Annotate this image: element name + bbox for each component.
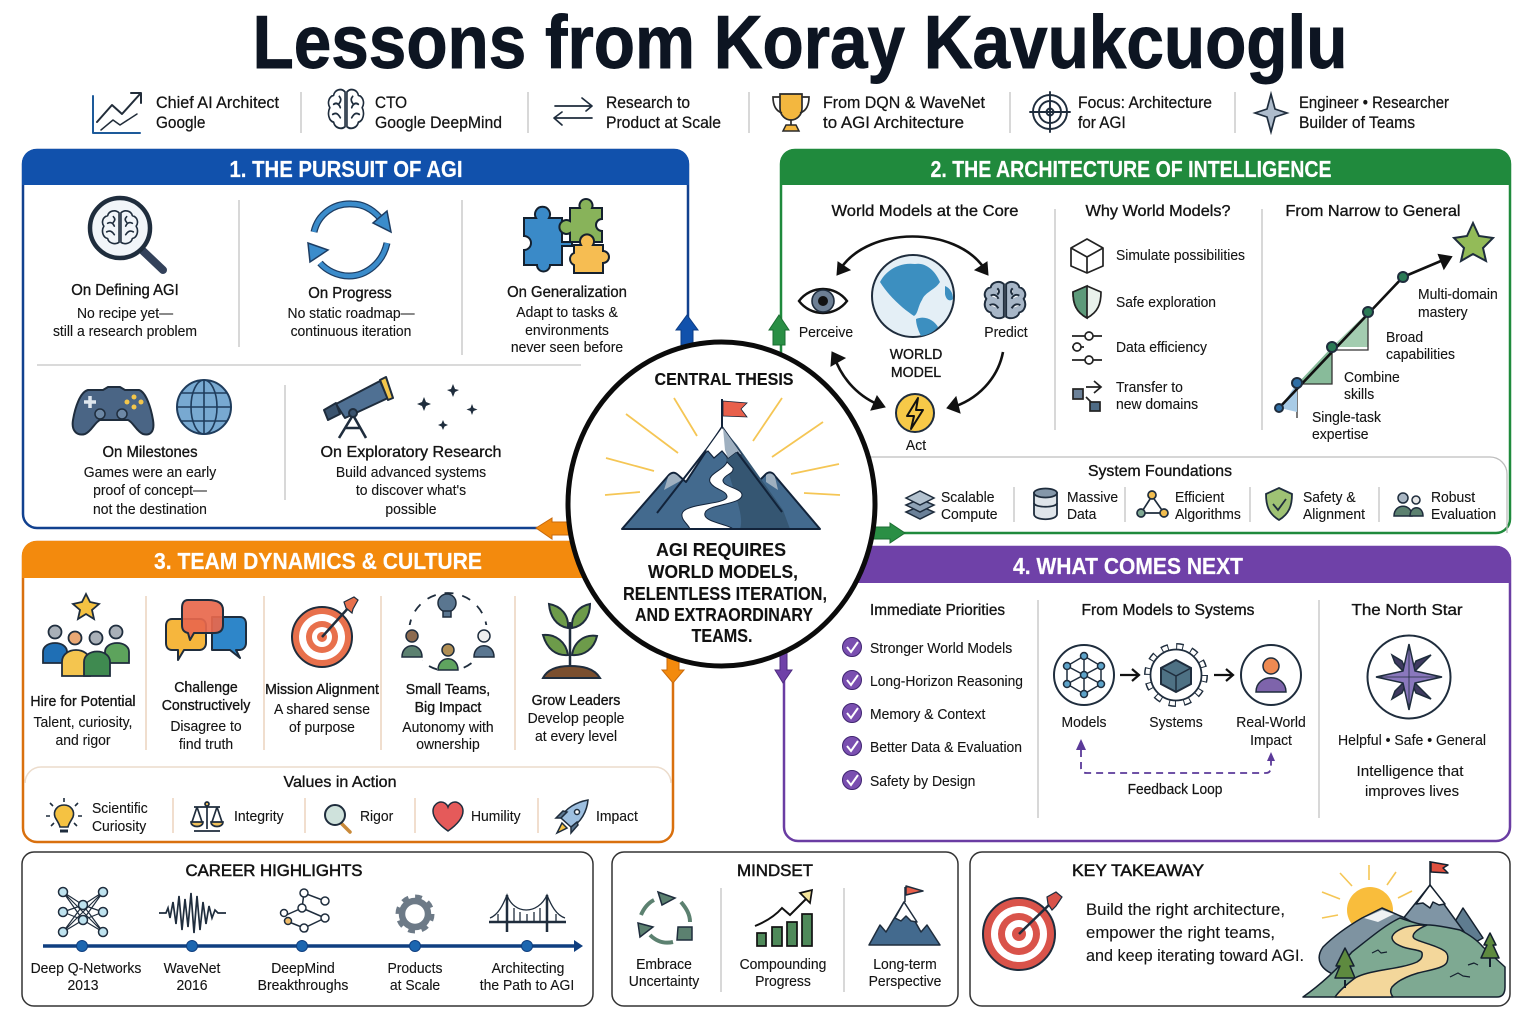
thesis statement: AND EXTRAORDINARY xyxy=(635,604,814,625)
Scientific Curiosity xyxy=(92,801,148,835)
arrow: to panel 3 xyxy=(536,518,572,539)
Hire for Potential text: Hire for Potential xyxy=(30,694,136,710)
icon: models network xyxy=(1054,645,1114,705)
credential second line: Google DeepMind xyxy=(375,114,502,132)
Long-term Perspective label xyxy=(869,957,941,990)
Massive Data: Massive xyxy=(1067,490,1118,506)
stair labels: skills xyxy=(1344,387,1374,403)
stair labels: Single-task xyxy=(1312,410,1382,426)
icon: mountain with flag and path xyxy=(622,399,820,529)
icon: neural network xyxy=(58,888,108,936)
values in action box xyxy=(25,767,671,835)
panel 4: what comes next xyxy=(784,546,1511,841)
timeline labels: Deep Q-Networks xyxy=(31,961,141,977)
stair labels: Broad xyxy=(1386,330,1423,346)
timeline labels: 2016 xyxy=(177,978,207,994)
Compounding Progress label: Progress xyxy=(755,974,811,990)
On Exploratory Research text: Build advanced systems xyxy=(336,465,486,481)
Perceive label: Perceive xyxy=(799,325,853,341)
world model cycle xyxy=(799,236,1028,454)
icon: green shield xyxy=(1266,488,1292,520)
Grow Leaders text xyxy=(528,693,624,745)
timeline labels: Products xyxy=(387,961,443,977)
Embrace Uncertainty label: Embrace xyxy=(636,957,692,973)
icon: four-point star xyxy=(1255,94,1287,132)
icon: compounding chart xyxy=(755,890,812,946)
check: safety xyxy=(842,770,862,790)
icon: globe grid xyxy=(177,380,231,434)
sun xyxy=(1347,887,1393,933)
icon: eye xyxy=(799,289,847,313)
icon: waveform xyxy=(159,893,226,933)
arrow: systems to impact xyxy=(1214,669,1233,681)
check: stronger world models xyxy=(842,638,862,656)
subheading: immediate priorities: Immediate Priorities xyxy=(870,602,1005,619)
panel 4 heading: 4. WHAT COMES NEXT xyxy=(1013,553,1243,579)
trend line xyxy=(1275,255,1451,412)
icon: puzzle pieces xyxy=(524,199,609,273)
icon: lightbulb xyxy=(46,798,82,831)
panel: key takeaway xyxy=(970,852,1510,1006)
icon: crosshair target xyxy=(1030,92,1070,132)
icon: people xyxy=(1394,493,1423,516)
timeline labels: Architecting xyxy=(492,961,564,977)
credentials bar xyxy=(93,90,1449,133)
icon: compass rose xyxy=(1368,636,1450,718)
credential second line: for AGI xyxy=(1078,115,1126,132)
Safety and Alignment xyxy=(1303,490,1365,523)
stair labels: capabilities xyxy=(1386,347,1455,363)
Hire for Potential text: and rigor xyxy=(56,733,111,749)
diagram labels: Models xyxy=(1062,715,1106,731)
diagram labels: Impact xyxy=(1250,733,1292,749)
Small Teams text: Big Impact xyxy=(415,700,481,716)
credential second line: to AGI Architecture xyxy=(823,114,964,132)
diagram labels: Real-World xyxy=(1236,715,1306,731)
Challenge Constructively text xyxy=(162,680,251,753)
panel 1: the pursuit of AGI xyxy=(22,149,689,528)
feedback loop label: Feedback Loop xyxy=(1128,782,1222,798)
icon: star xyxy=(1454,223,1493,261)
arrow: orange down xyxy=(662,655,684,683)
career heading: CAREER HIGHLIGHTS xyxy=(186,861,362,880)
icon: telescope xyxy=(324,377,393,438)
arrow: to panel 2 xyxy=(769,315,789,345)
credential second line: Product at Scale xyxy=(606,114,721,132)
icon: impact person xyxy=(1241,645,1301,705)
Grow Leaders text: Grow Leaders xyxy=(532,693,620,709)
timeline labels: DeepMind xyxy=(271,961,335,977)
Challenge Constructively text: Challenge xyxy=(174,680,238,696)
icon: bridge xyxy=(489,895,566,932)
models to systems diagram xyxy=(1054,602,1306,798)
key takeaway text: empower the right teams, xyxy=(1086,924,1275,942)
subheading: why: Why World Models? xyxy=(1086,203,1231,220)
icon: mountain flag small xyxy=(869,886,940,945)
world model label: WORLD xyxy=(890,347,942,363)
icon: game controller xyxy=(73,387,153,434)
tufts xyxy=(1372,950,1478,977)
icon: mission target xyxy=(292,597,358,667)
icon: act lightning xyxy=(896,394,934,432)
Robust Evaluation: Evaluation xyxy=(1431,507,1496,523)
Safe exploration: Safe exploration xyxy=(1116,294,1216,311)
central thesis circle xyxy=(568,342,875,666)
icon: chat bubbles xyxy=(166,600,246,660)
subheading: The North Star xyxy=(1352,602,1463,619)
staircase chart: narrow to general xyxy=(1275,223,1498,443)
step fills xyxy=(1280,308,1368,418)
icon: small team circle xyxy=(400,593,495,677)
panel 1 header xyxy=(22,149,689,185)
panel: career highlights xyxy=(22,852,593,1006)
connector arrows to center xyxy=(536,315,905,683)
icon: cycle arrows xyxy=(308,204,391,276)
panel 2 heading: 2. THE ARCHITECTURE OF INTELLIGENCE xyxy=(930,156,1332,182)
icon: systems gear xyxy=(1148,647,1204,703)
timeline dots xyxy=(76,940,532,952)
panel 3 header xyxy=(22,541,620,578)
On Generalization text: Adapt to tasks & xyxy=(516,305,618,321)
diagram labels: Systems xyxy=(1149,715,1203,731)
On Milestones text: Games were an early xyxy=(84,465,217,481)
values heading: Values in Action xyxy=(284,774,396,791)
Rigor: Rigor xyxy=(360,809,393,825)
thesis statement: RELENTLESS ITERATION, xyxy=(623,583,827,604)
On Exploratory Research text: to discover what's xyxy=(356,483,466,499)
priorities checklist xyxy=(842,638,1023,790)
timeline labels: 2013 xyxy=(68,978,98,994)
winding path xyxy=(1335,925,1448,997)
north star text: Helpful • Safe • General xyxy=(1338,732,1486,749)
left snow xyxy=(1364,910,1394,922)
Hire for Potential text: Talent, curiosity, xyxy=(34,715,132,731)
Long-term Perspective label: Perspective xyxy=(869,974,941,990)
key takeaway text: and keep iterating toward AGI. xyxy=(1086,947,1304,965)
Transfer text: Transfer to xyxy=(1116,380,1183,396)
timeline labels: the Path to AGI xyxy=(480,978,574,994)
icon: scales xyxy=(191,802,223,831)
illustration: mountain landscape xyxy=(1303,861,1505,997)
subheading: From Models to Systems xyxy=(1082,602,1254,619)
arrow: green right xyxy=(870,523,905,543)
Transfer text: new domains xyxy=(1116,397,1198,413)
Safety and Alignment: Alignment xyxy=(1303,507,1365,523)
On Defining AGI text xyxy=(53,282,197,340)
Simulate possibilities: Simulate possibilities xyxy=(1116,247,1245,264)
Challenge Constructively text: find truth xyxy=(179,737,233,753)
arrow: to panel 1 xyxy=(676,315,698,345)
stair labels: Combine xyxy=(1344,370,1400,386)
panel 4 header xyxy=(840,546,1511,583)
Embrace Uncertainty label: Uncertainty xyxy=(629,974,700,990)
Mission Alignment text: of purpose xyxy=(289,720,355,736)
subheading: narrow to general: From Narrow to General xyxy=(1286,203,1460,220)
icon: trophy xyxy=(773,94,809,131)
why world models list xyxy=(1071,239,1245,413)
On Exploratory Research text: On Exploratory Research xyxy=(320,444,502,461)
timeline labels: WaveNet xyxy=(164,961,220,977)
credential: CTO: CTO xyxy=(375,95,407,112)
icon: exchange arrows xyxy=(554,98,592,125)
Robust Evaluation xyxy=(1431,490,1496,523)
icon: rocket xyxy=(556,800,588,833)
thesis statement: AGI REQUIRES xyxy=(656,539,786,560)
icon: gear xyxy=(398,897,432,931)
Integrity: Integrity xyxy=(234,809,284,825)
Scientific Curiosity: Curiosity xyxy=(92,819,147,835)
snow cap xyxy=(1416,885,1445,908)
Small Teams text: ownership xyxy=(416,737,480,753)
mindset heading: MINDSET xyxy=(737,861,813,880)
On Progress text xyxy=(288,285,415,340)
On Progress text: On Progress xyxy=(308,285,392,302)
flag pennant xyxy=(1431,862,1448,873)
thesis statement: TEAMS. xyxy=(692,625,752,646)
north star text: Intelligence that xyxy=(1356,763,1464,780)
left mountain xyxy=(1319,908,1425,975)
Robust Evaluation: Robust xyxy=(1431,490,1475,506)
thesis statement: WORLD MODELS, xyxy=(648,561,798,582)
On Generalization text xyxy=(507,284,627,356)
arrow: models to systems xyxy=(1120,669,1139,681)
arrow: purple down xyxy=(775,650,792,683)
Embrace Uncertainty label xyxy=(629,957,700,990)
foundations heading: System Foundations xyxy=(1088,463,1232,480)
Memory and Context: Memory & Context xyxy=(870,707,985,723)
On Exploratory Research text: possible xyxy=(385,502,437,518)
On Milestones text: not the destination xyxy=(93,502,207,518)
Long-Horizon Reasoning: Long-Horizon Reasoning xyxy=(870,673,1023,690)
right tree xyxy=(1481,933,1499,967)
Massive Data xyxy=(1067,490,1118,523)
Mission Alignment text xyxy=(265,682,379,736)
icon: cube xyxy=(1071,239,1103,273)
stair labels: mastery xyxy=(1418,305,1468,321)
sun rays xyxy=(605,398,840,495)
north star text xyxy=(1338,732,1486,800)
icon: magnifier over brain xyxy=(90,198,163,270)
sun rays xyxy=(1322,865,1412,918)
panel 3: team dynamics and culture xyxy=(22,541,673,842)
Compounding Progress label: Compounding xyxy=(740,957,826,973)
panel 1 heading: 1. THE PURSUIT OF AGI xyxy=(230,156,462,182)
icon: recycle arrows xyxy=(638,892,692,943)
Efficient Algorithms xyxy=(1175,490,1241,523)
Efficient Algorithms: Algorithms xyxy=(1175,507,1241,523)
credential: research to product: Research to xyxy=(606,94,690,112)
timeline labels: Breakthroughs xyxy=(258,978,348,994)
icon: small magnifier xyxy=(325,805,350,832)
north star text: improves lives xyxy=(1365,783,1459,800)
icon: brain outline xyxy=(329,90,363,128)
credential: focus: Focus: Architecture xyxy=(1078,94,1212,112)
feedback loop arrow xyxy=(1076,739,1275,773)
On Milestones text: proof of concept— xyxy=(93,483,207,499)
Massive Data: Data xyxy=(1067,507,1097,523)
Grow Leaders text: at every level xyxy=(535,729,617,745)
panel 2: the architecture of intelligence xyxy=(780,149,1511,533)
icon: DeepMind graph xyxy=(280,889,329,932)
Mission Alignment text: A shared sense xyxy=(274,702,370,718)
On Defining AGI text: still a research problem xyxy=(53,324,197,340)
icon: stars xyxy=(417,384,478,430)
icon: algorithm graph xyxy=(1137,491,1168,517)
On Milestones text: On Milestones xyxy=(102,444,198,461)
icon: plant xyxy=(543,604,600,678)
stair labels xyxy=(1312,287,1498,443)
panel 2 header xyxy=(780,149,1511,185)
Scalable Compute xyxy=(941,490,998,523)
icon: earth globe xyxy=(872,255,954,337)
icon: star over people xyxy=(43,594,129,676)
Impact: Impact xyxy=(596,809,638,825)
credential: role at Google: Chief AI Architect xyxy=(156,94,279,112)
Compounding Progress label xyxy=(740,957,826,990)
system foundations box xyxy=(860,457,1507,533)
credential: engineer researcher: Engineer • Researcher xyxy=(1299,94,1449,112)
check: long-horizon xyxy=(842,670,862,690)
Safety by Design: Safety by Design xyxy=(870,774,975,790)
Small Teams text: Small Teams, xyxy=(406,682,490,698)
Efficient Algorithms: Efficient xyxy=(1175,490,1224,506)
On Defining AGI text: No recipe yet— xyxy=(77,306,174,322)
Better Data and Evaluation: Better Data & Evaluation xyxy=(870,739,1022,756)
icon: brain xyxy=(985,282,1025,318)
key takeaway heading: KEY TAKEAWAY xyxy=(1072,861,1204,880)
Humility: Humility xyxy=(471,809,521,825)
timeline xyxy=(43,940,583,952)
icon: sliders xyxy=(1072,332,1102,364)
panel 3 heading: 3. TEAM DYNAMICS & CULTURE xyxy=(154,548,482,574)
On Exploratory Research text xyxy=(320,444,502,518)
check: memory xyxy=(842,704,862,722)
main peak xyxy=(1398,885,1470,940)
Scalable Compute: Compute xyxy=(941,507,998,523)
On Progress text: continuous iteration xyxy=(291,324,411,340)
timeline labels xyxy=(31,961,574,994)
central thesis label: CENTRAL THESIS xyxy=(654,369,794,389)
cycle arrows xyxy=(831,236,1003,413)
Predict label: Predict xyxy=(984,325,1028,341)
right peak xyxy=(1450,908,1483,945)
icon: database xyxy=(1034,488,1057,519)
credential: DQN and WaveNet: From DQN & WaveNet xyxy=(823,94,985,112)
Small Teams text: Autonomy with xyxy=(402,720,494,736)
icon: heart xyxy=(433,802,463,831)
Stronger World Models: Stronger World Models xyxy=(870,641,1012,657)
icon: stacked layers xyxy=(906,491,934,519)
key takeaway text xyxy=(1086,901,1304,965)
icon: transfer xyxy=(1073,381,1101,411)
Scalable Compute: Scalable xyxy=(941,490,994,506)
thesis statement xyxy=(623,539,827,646)
timeline labels: at Scale xyxy=(390,978,440,994)
subheading: world models: World Models at the Core xyxy=(832,203,1019,220)
Small Teams text xyxy=(402,682,494,753)
title: Lessons from Koray Kavukcuoglu xyxy=(252,0,1348,84)
Challenge Constructively text: Disagree to xyxy=(170,719,242,735)
On Generalization text: environments xyxy=(525,323,609,339)
Challenge Constructively text: Constructively xyxy=(162,698,251,714)
hill xyxy=(1303,918,1505,997)
flag pole xyxy=(1429,861,1431,885)
icon: growth chart xyxy=(93,93,141,133)
key takeaway text: Build the right architecture, xyxy=(1086,901,1285,919)
credential second line: Builder of Teams xyxy=(1299,114,1415,132)
left tree xyxy=(1335,948,1355,988)
Long-term Perspective label: Long-term xyxy=(873,957,937,973)
Grow Leaders text: Develop people xyxy=(528,711,624,727)
On Defining AGI text: On Defining AGI xyxy=(71,282,179,299)
Transfer text xyxy=(1116,380,1198,413)
icon: shield xyxy=(1073,286,1101,318)
Safety and Alignment: Safety & xyxy=(1303,490,1356,506)
Scientific Curiosity: Scientific xyxy=(92,801,148,817)
On Generalization text: On Generalization xyxy=(507,284,627,301)
Hire for Potential text xyxy=(30,694,136,749)
On Progress text: No static roadmap— xyxy=(288,306,415,322)
diagram labels xyxy=(1062,715,1306,749)
Act label: Act xyxy=(906,438,926,454)
panel: mindset xyxy=(612,852,958,1006)
stair labels: Multi-domain xyxy=(1418,287,1498,303)
world model label: MODEL xyxy=(891,365,941,381)
icon: red target xyxy=(983,892,1062,970)
world model label xyxy=(890,347,942,381)
On Milestones text xyxy=(84,444,217,518)
Mission Alignment text: Mission Alignment xyxy=(265,682,379,698)
Data efficiency: Data efficiency xyxy=(1116,339,1207,356)
stair labels: expertise xyxy=(1312,427,1369,443)
credential second line: Google xyxy=(156,115,206,132)
north star xyxy=(1338,602,1486,800)
check: better data xyxy=(842,736,862,756)
On Generalization text: never seen before xyxy=(511,340,623,356)
